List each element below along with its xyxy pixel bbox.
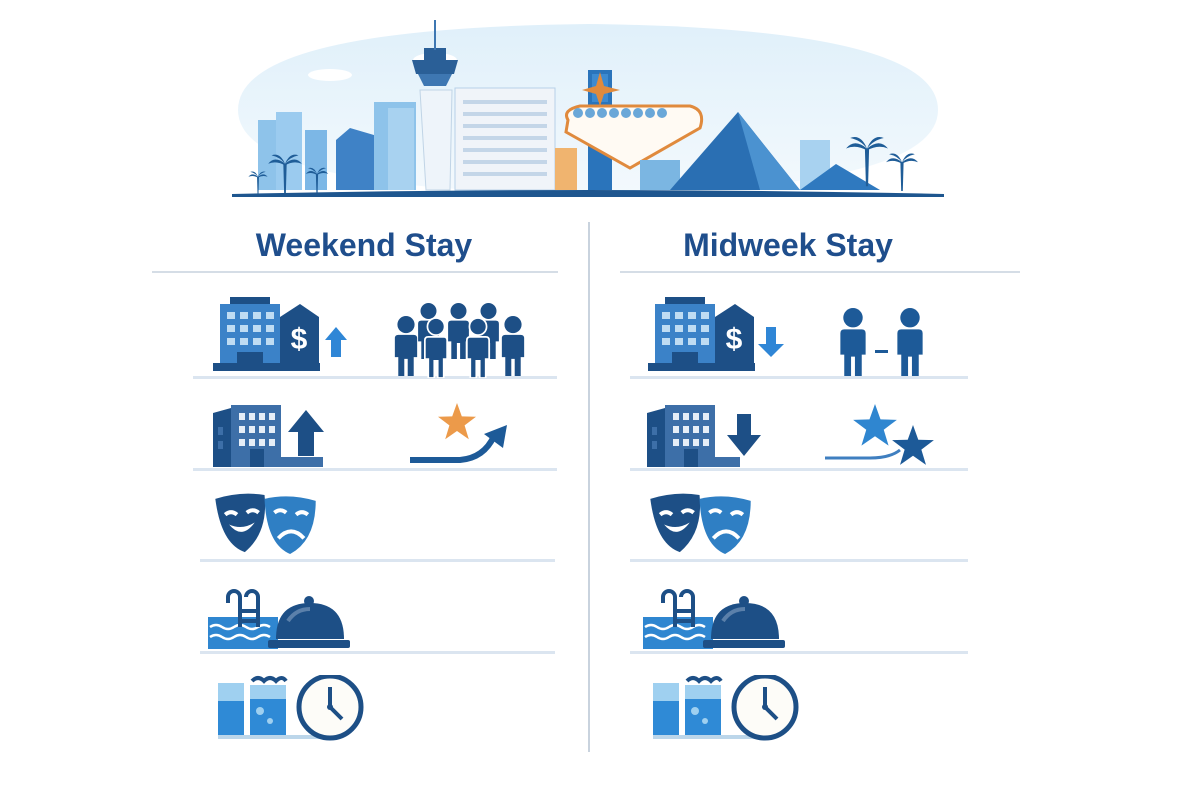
icon: drinks and clock [210,676,361,739]
skyline header [232,20,1112,197]
panel: midweek stay icons [643,297,934,739]
icon: drinks and clock [645,676,796,739]
icon: building with up arrow [213,405,324,467]
panel: weekend stay icons [208,297,524,739]
icon: theater masks [650,494,751,554]
icon: hotel price up [213,297,347,371]
heading: Weekend Stay: Weekend Stay [256,227,472,263]
icon: pool and dining [643,591,785,649]
icon: pool and dining [208,591,350,649]
icon: theater masks [215,494,316,554]
icon: two people [840,308,923,376]
icon: hotel price down [648,297,784,371]
heading: Midweek Stay: Midweek Stay [683,227,893,263]
icon: crowd [395,303,524,378]
icon: star with rising arrow [410,403,507,460]
icon: building with down arrow [647,405,761,467]
icon: two stars [825,404,934,465]
